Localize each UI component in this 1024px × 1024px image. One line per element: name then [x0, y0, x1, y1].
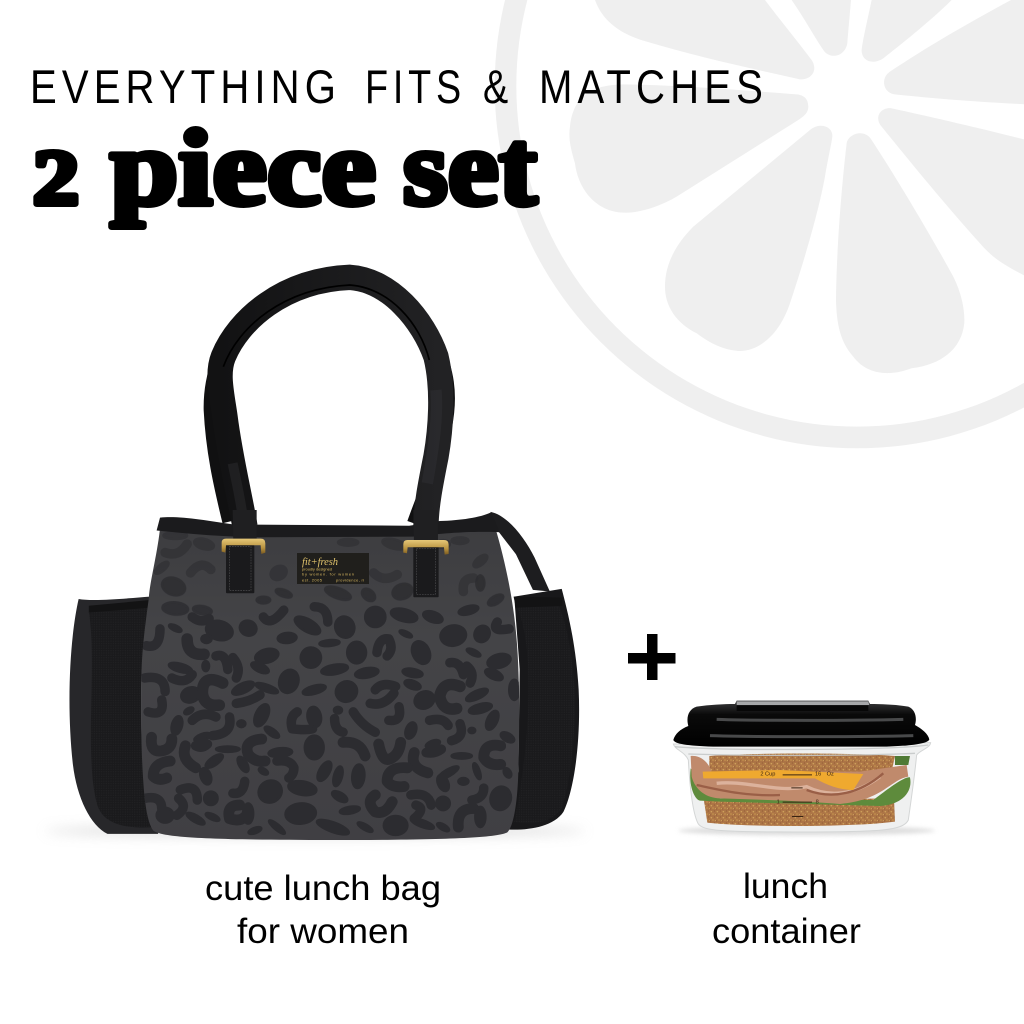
subtitle: everything fits and matches: MATCHES	[539, 60, 768, 113]
measurement marks: 2 Cup	[760, 772, 775, 778]
brand label: providence, ri	[336, 578, 364, 582]
measurement marks: Oz	[827, 772, 834, 778]
caption: lunch container	[712, 867, 861, 951]
rear strap	[491, 512, 550, 592]
bag handles	[211, 273, 448, 527]
caption: lunch bag: for women	[237, 912, 409, 951]
brand label: est. 2005	[302, 578, 323, 582]
container shadow	[678, 826, 935, 835]
lunch container	[673, 701, 935, 835]
heading: 2 piece set: set	[403, 109, 537, 228]
sandwich	[690, 753, 910, 826]
brand label: proudly designed	[302, 566, 332, 572]
heading: 2 piece set	[33, 109, 537, 228]
subtitle: everything fits and matches: FITS	[365, 60, 466, 113]
heading: 2 piece set: 2	[33, 134, 79, 221]
subtitle: everything fits and matches: EVERYTHING	[30, 60, 341, 113]
clear tub	[673, 743, 931, 832]
subtitle: everything fits and matches: &	[483, 60, 513, 113]
measurement marks: 8	[816, 800, 819, 806]
measurement marks	[760, 772, 834, 817]
leopard spots	[153, 532, 489, 592]
background lemon slice watermark	[495, 0, 1024, 448]
measurement marks: 16	[815, 772, 821, 778]
lemon rind ring	[495, 0, 1024, 448]
lunch bag	[45, 273, 585, 840]
brand label	[297, 553, 369, 584]
measurement marks: 1	[777, 800, 780, 806]
brand label: by women. for women	[302, 572, 354, 576]
caption: lunch bag	[205, 869, 441, 951]
left mesh pocket	[69, 597, 158, 834]
caption: lunch container: lunch	[743, 867, 828, 906]
bag shadow	[45, 825, 585, 837]
lemon segments	[569, 0, 1024, 373]
subtitle: everything fits and matches	[30, 60, 768, 113]
black lid	[673, 701, 929, 747]
plus sign	[628, 634, 676, 680]
bag top binding	[157, 512, 500, 537]
leopard print body	[141, 512, 519, 840]
tub rim	[675, 745, 928, 755]
strap tabs and gold buckles	[222, 510, 449, 597]
heading: 2 piece set: piece	[110, 109, 376, 228]
brand label: fit+fresh	[302, 557, 338, 568]
right mesh pocket	[507, 589, 579, 830]
caption: lunch container: container	[712, 912, 861, 951]
caption: lunch bag: cute lunch bag	[205, 869, 441, 908]
